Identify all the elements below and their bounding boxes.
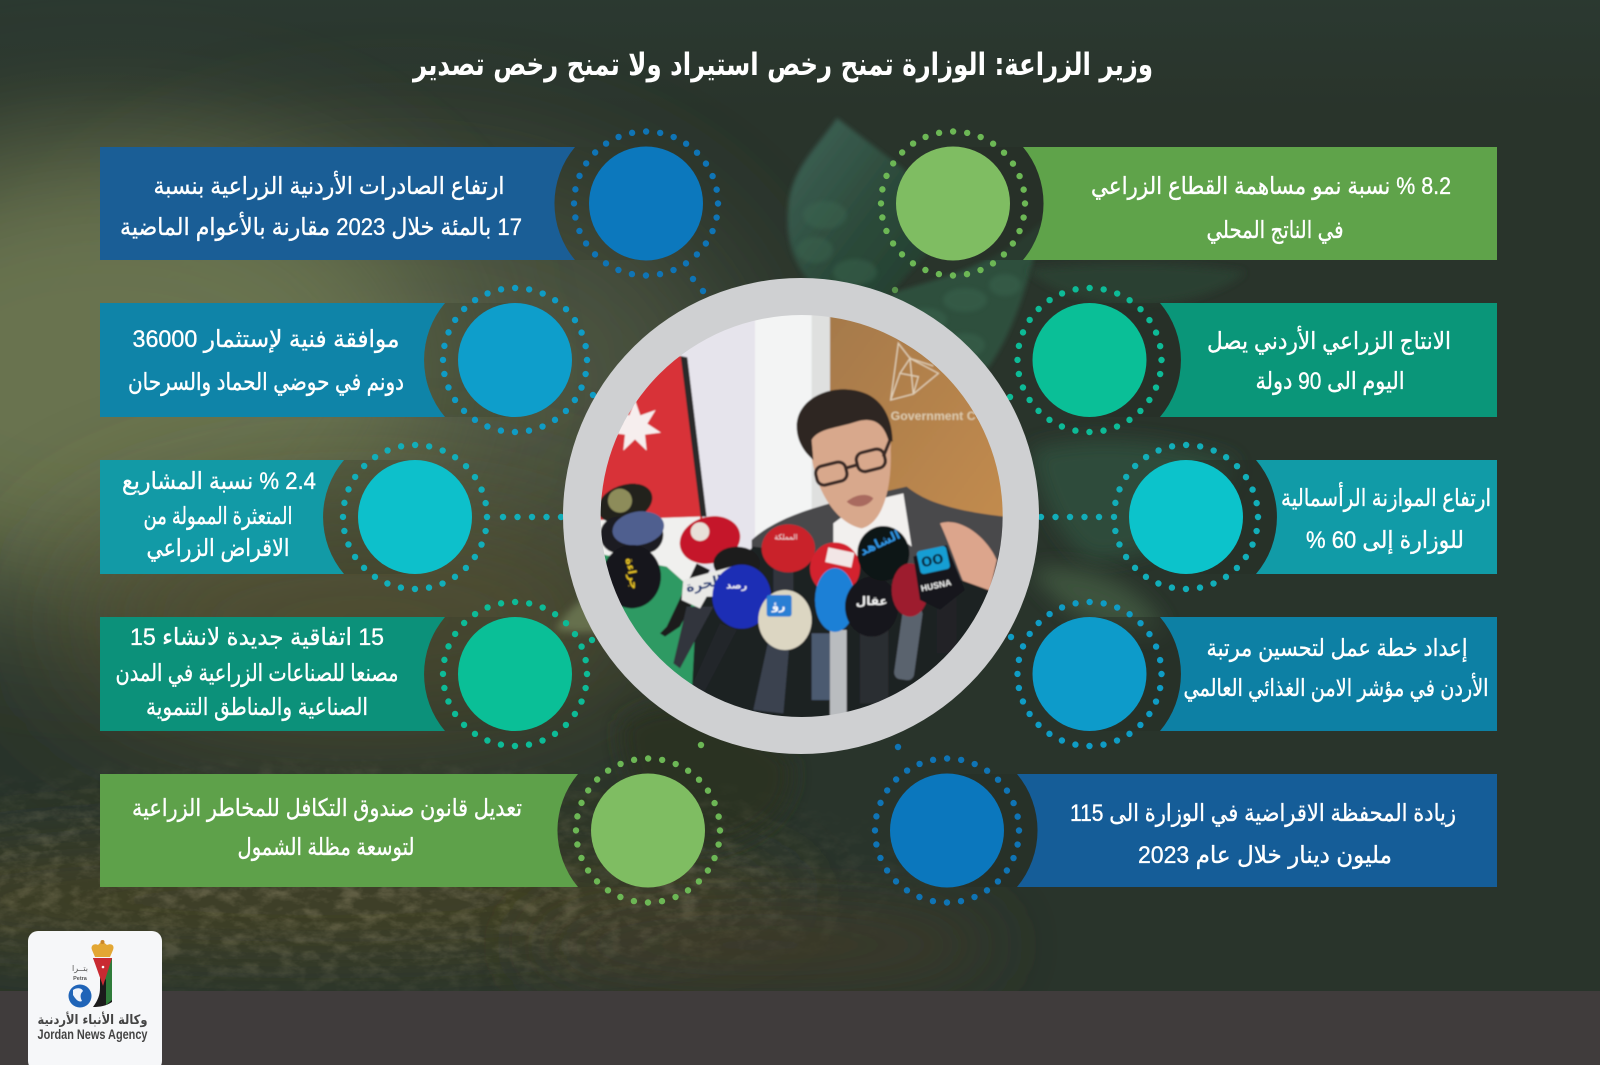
crescent — [424, 617, 515, 731]
text: اليوم الى 90 دولة — [1256, 368, 1404, 395]
microphones: رؤ — [771, 598, 785, 612]
dotted ring — [1018, 288, 1162, 432]
dotted ring — [881, 132, 1025, 276]
dotted ring — [574, 132, 718, 276]
panel: 8.2 percent sector growth — [881, 132, 1497, 276]
petra wordmark: Petra — [73, 976, 88, 982]
text: ارتفاع الصادرات الأردنية الزراعية بنسبة — [154, 171, 504, 200]
text: الانتاج الزراعي الأردني يصل — [1207, 326, 1451, 355]
ribbon — [100, 460, 344, 574]
circle — [1129, 460, 1243, 574]
panel: 2.4 percent troubled projects — [100, 445, 487, 589]
microphones: OO — [920, 552, 945, 571]
circle — [589, 146, 703, 260]
title: وزير الزراعة: الوزارة تمنح رخص استيراد ولا تمنح رخص تصدير — [411, 47, 1153, 83]
crescent — [424, 303, 515, 417]
text: إعداد خطة عمل لتحسين مرتبة — [1206, 635, 1468, 663]
text — [1091, 173, 1451, 244]
text — [132, 795, 522, 861]
text: دونم في حوضي الحماد والسرحان — [128, 369, 404, 396]
circle — [1032, 303, 1146, 417]
crescent — [323, 460, 415, 574]
ribbon — [100, 303, 445, 417]
microphones: جراءة — [623, 557, 642, 590]
icon: globe — [68, 984, 92, 1008]
ribbon — [1256, 460, 1497, 574]
text — [1281, 482, 1491, 555]
agency name: وكالة الأنباء الأردنية — [38, 1011, 148, 1028]
panel: exports up 17 percent — [100, 132, 718, 276]
text: 17 بالمئة خلال 2023 مقارنة بالأعوام الماضية — [120, 212, 522, 241]
logo card — [28, 931, 162, 1065]
ribbon — [100, 147, 575, 260]
circle — [1032, 617, 1146, 731]
text — [116, 624, 398, 721]
text: المتعثرة الممولة من — [144, 503, 292, 530]
text — [120, 171, 522, 241]
text: ارتفاع الموازنة الرأسمالية — [1281, 482, 1491, 512]
text: 2.4 % نسبة المشاريع — [122, 468, 316, 495]
center ring — [563, 278, 1039, 754]
text: 15 اتفاقية جديدة لانشاء 15 — [130, 624, 384, 651]
ribbon — [1023, 147, 1497, 260]
panel: 36000 dunums approval — [100, 288, 587, 432]
microphones: HUSNA — [920, 577, 953, 593]
crescent — [1089, 303, 1181, 417]
text: تعديل قانون صندوق التكافل للمخاطر الزراعية — [132, 795, 522, 822]
text: الصناعية والمناطق التنموية — [146, 694, 368, 721]
panel: capital budget up 60 percent — [1114, 445, 1497, 589]
icon: jordan shield — [93, 958, 112, 1007]
circle — [458, 617, 572, 731]
circle — [458, 303, 572, 417]
circle — [896, 146, 1010, 260]
dark backing under microphones — [692, 546, 988, 717]
icon: crown — [92, 940, 114, 957]
circle — [358, 460, 472, 574]
connector: right row 3 dots — [1041, 514, 1113, 520]
footer bar — [0, 991, 1600, 1065]
jordan flag — [600, 355, 708, 686]
text — [122, 468, 316, 562]
petra wordmark — [72, 964, 88, 982]
panel: 15 agreements for 15 factories — [100, 602, 587, 746]
panel: food security plan — [1018, 602, 1497, 746]
text: زيادة المحفظة الاقراضية في الوزارة الى 115 — [1070, 800, 1456, 827]
text: في الناتج المحلي — [1206, 217, 1344, 244]
dotted ring — [443, 288, 587, 432]
agency name — [38, 1011, 148, 1042]
panel: lending portfolio 115 million — [875, 758, 1497, 902]
text — [128, 326, 404, 396]
center photo: minister at press microphones — [592, 313, 1007, 727]
photo backdrop — [680, 315, 1003, 573]
text: للوزارة إلى 60 % — [1306, 527, 1464, 555]
agency name: Jordan News Agency — [38, 1026, 148, 1042]
circle — [591, 774, 705, 888]
dotted ring — [343, 445, 487, 589]
background: blurred plant and soil photo — [0, 74, 1234, 991]
text: الأردن في مؤشر الامن الغذائي العالمي — [1184, 673, 1488, 702]
ribbon — [100, 617, 445, 731]
petra wordmark: بتــرا — [72, 964, 88, 973]
circle — [890, 774, 1004, 888]
ribbon — [1017, 774, 1497, 887]
microphones: الشاهد — [857, 527, 902, 558]
crescent — [554, 147, 646, 260]
crescent — [947, 774, 1038, 887]
text — [1070, 800, 1456, 869]
text: لتوسعة مظلة الشمول — [238, 834, 414, 861]
dotted ring — [1114, 445, 1258, 589]
connector: left row 3 dots — [503, 514, 563, 520]
dotted ring — [443, 602, 587, 746]
connector dots: diagonal stubs — [589, 276, 1014, 750]
text: الاقراض الزراعي — [146, 535, 290, 562]
photo backdrop: Government C — [891, 409, 976, 423]
ribbon — [1160, 303, 1497, 417]
microphones: الحرة — [684, 573, 724, 596]
text — [1207, 326, 1451, 395]
text: 8.2 % نسبة نمو مساهمة القطاع الزراعي — [1091, 173, 1451, 200]
ribbon — [1160, 617, 1497, 731]
dotted ring — [1018, 602, 1162, 746]
crescent — [953, 147, 1044, 260]
microphones: المملكة — [774, 532, 798, 541]
text: مليون دينار خلال عام 2023 — [1138, 842, 1392, 869]
text: موافقة فنية لإستثمار 36000 — [133, 326, 400, 353]
microphones: عقال — [856, 594, 888, 608]
text — [1184, 635, 1488, 702]
crescent — [1089, 617, 1181, 731]
crescent — [557, 774, 648, 887]
dotted ring — [576, 758, 720, 902]
microphones — [592, 476, 965, 717]
minister — [750, 388, 1003, 591]
crescent — [1186, 460, 1277, 574]
ribbon — [100, 774, 578, 887]
dotted ring — [875, 758, 1019, 902]
text: مصنعا للصناعات الزراعية في المدن — [116, 660, 398, 687]
microphones: رصد — [726, 580, 747, 591]
panel: solidarity fund law — [100, 758, 720, 902]
panel: exports reach 90 countries — [1018, 288, 1497, 432]
